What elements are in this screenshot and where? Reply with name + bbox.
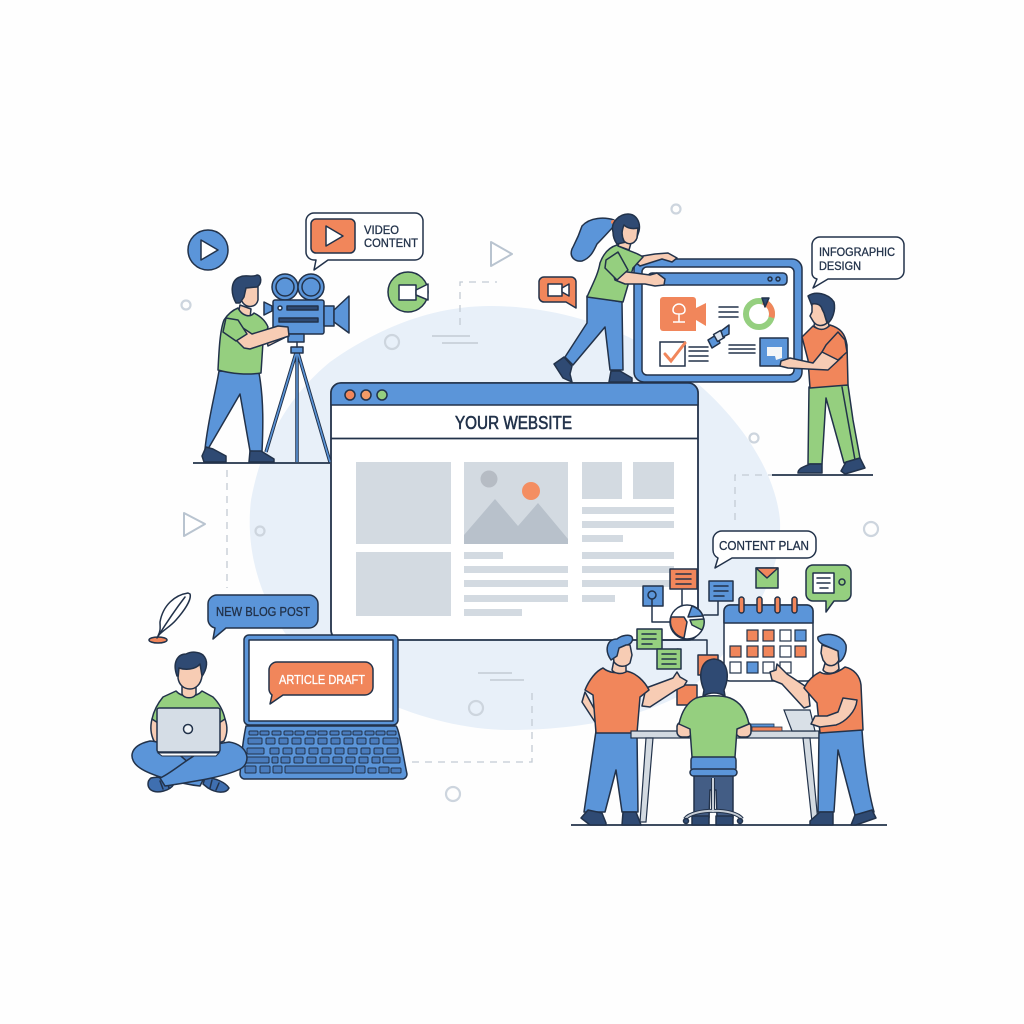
callout: article draft (269, 662, 373, 704)
window control dots (345, 390, 387, 400)
trousers (584, 731, 638, 812)
date cells (730, 630, 806, 673)
decorative rings (182, 204, 878, 801)
bare arms (151, 719, 158, 743)
satellite connector (708, 325, 729, 348)
donut chart (746, 298, 772, 327)
heading: your website: YOUR WEBSITE (455, 413, 572, 433)
ground line (193, 462, 330, 464)
binder rings (739, 597, 797, 613)
face (613, 644, 632, 666)
desk (631, 710, 826, 822)
node: blue note (709, 581, 733, 601)
blue tile (760, 338, 788, 366)
person: videographer with camera (193, 274, 349, 463)
sleeve (822, 332, 847, 360)
node: blue pin (643, 586, 663, 606)
ground line (772, 474, 873, 476)
back arm (582, 692, 596, 722)
callout: content plan (713, 531, 816, 568)
icon: quill feather (149, 593, 190, 643)
shirt (218, 308, 268, 374)
head (240, 284, 258, 306)
keyboard keys (245, 731, 401, 773)
callout: article draft: ARTICLE DRAFT (279, 672, 365, 687)
content placeholders (356, 462, 674, 616)
callout: content plan: CONTENT PLAN (719, 539, 809, 553)
sleeve (605, 252, 628, 280)
node: orange squares (677, 655, 718, 705)
forward arm (232, 326, 289, 349)
trousers (808, 385, 860, 464)
panel: website window (331, 383, 698, 640)
checkbox (660, 342, 685, 366)
callout: infographic design: DESIGN (819, 259, 861, 273)
trousers (818, 730, 874, 815)
node: orange note (670, 569, 697, 589)
hair back (175, 652, 207, 678)
hair (232, 275, 261, 303)
desk scene ground line (571, 824, 887, 826)
trousers (205, 371, 263, 452)
callout: new blog post (208, 595, 318, 639)
icon: green note bubble (806, 565, 851, 612)
tripod (266, 353, 330, 462)
chair (684, 778, 742, 824)
face (821, 645, 839, 666)
callout: video content: CONTENT (364, 236, 419, 250)
person: blogger sitting cross-legged (132, 652, 247, 792)
shoe laces (160, 780, 219, 790)
image placeholder (464, 462, 568, 544)
callout: video content: VIDEO (364, 223, 399, 237)
icon: green video camera (388, 272, 428, 312)
node: green note lower (657, 649, 681, 669)
shoes (581, 810, 641, 825)
browser title bar (331, 383, 698, 405)
icon: outline play triangles (184, 242, 512, 536)
panel: infographic design monitor (634, 259, 802, 382)
calendar (724, 597, 813, 681)
hair (612, 214, 639, 244)
callout: video content (306, 213, 423, 270)
neck (814, 320, 829, 329)
person: man holding monitor (772, 293, 873, 475)
shoes (148, 777, 229, 792)
person: planner left (581, 635, 687, 825)
face (622, 225, 638, 244)
person: planner right (770, 634, 876, 825)
left leg (132, 741, 204, 786)
arm with tablet (811, 698, 857, 727)
shirt (679, 696, 749, 757)
text lines (689, 307, 755, 361)
shoes (798, 458, 865, 474)
shoes (554, 357, 632, 382)
shoes (692, 816, 733, 825)
callout: infographic design (812, 237, 904, 288)
face (178, 664, 202, 689)
sleeve (223, 318, 247, 341)
neck (823, 660, 839, 673)
neck (182, 686, 196, 698)
icon: play button (188, 230, 228, 270)
hair (701, 659, 727, 696)
ponytail (571, 218, 615, 261)
shoes (810, 810, 876, 825)
node: pie chart (670, 605, 704, 639)
hair (818, 634, 846, 662)
background blob (250, 306, 780, 730)
tablet (784, 710, 815, 731)
shirt (587, 245, 643, 302)
person: seated planner (677, 659, 751, 825)
right leg (160, 742, 247, 786)
node: green note upper (637, 629, 662, 649)
legs (694, 775, 733, 818)
person: woman with ponytail (554, 214, 677, 382)
front arm (612, 270, 665, 286)
front arm (642, 672, 687, 707)
shirt (804, 667, 863, 733)
callout: infographic design: INFOGRAPHIC (819, 245, 895, 259)
back arm (630, 253, 677, 266)
face (810, 304, 827, 325)
shoes (202, 447, 274, 462)
arms (677, 722, 751, 737)
shirt (802, 325, 848, 388)
laptop base (240, 726, 407, 779)
panel: large laptop (240, 635, 407, 779)
neck (612, 660, 626, 673)
arm pointing (770, 664, 810, 708)
lap shadow (163, 752, 210, 767)
trousers (565, 296, 623, 370)
papers on desk (748, 724, 782, 731)
icon: envelope (756, 568, 778, 588)
camera (264, 274, 349, 353)
monitor top bar (648, 273, 787, 285)
seat (690, 756, 737, 776)
hair (607, 635, 633, 660)
neck (618, 238, 631, 250)
arm (780, 348, 842, 370)
shirt (585, 668, 649, 733)
small laptop (157, 708, 220, 756)
callout: new blog post: NEW BLOG POST (216, 605, 310, 619)
diagram: content flow nodes (637, 569, 733, 705)
shirt (152, 691, 225, 745)
orange camera tile (660, 297, 706, 331)
icon: orange camera bubble (539, 277, 576, 308)
neck and arm back (266, 326, 290, 346)
hair (808, 293, 835, 323)
